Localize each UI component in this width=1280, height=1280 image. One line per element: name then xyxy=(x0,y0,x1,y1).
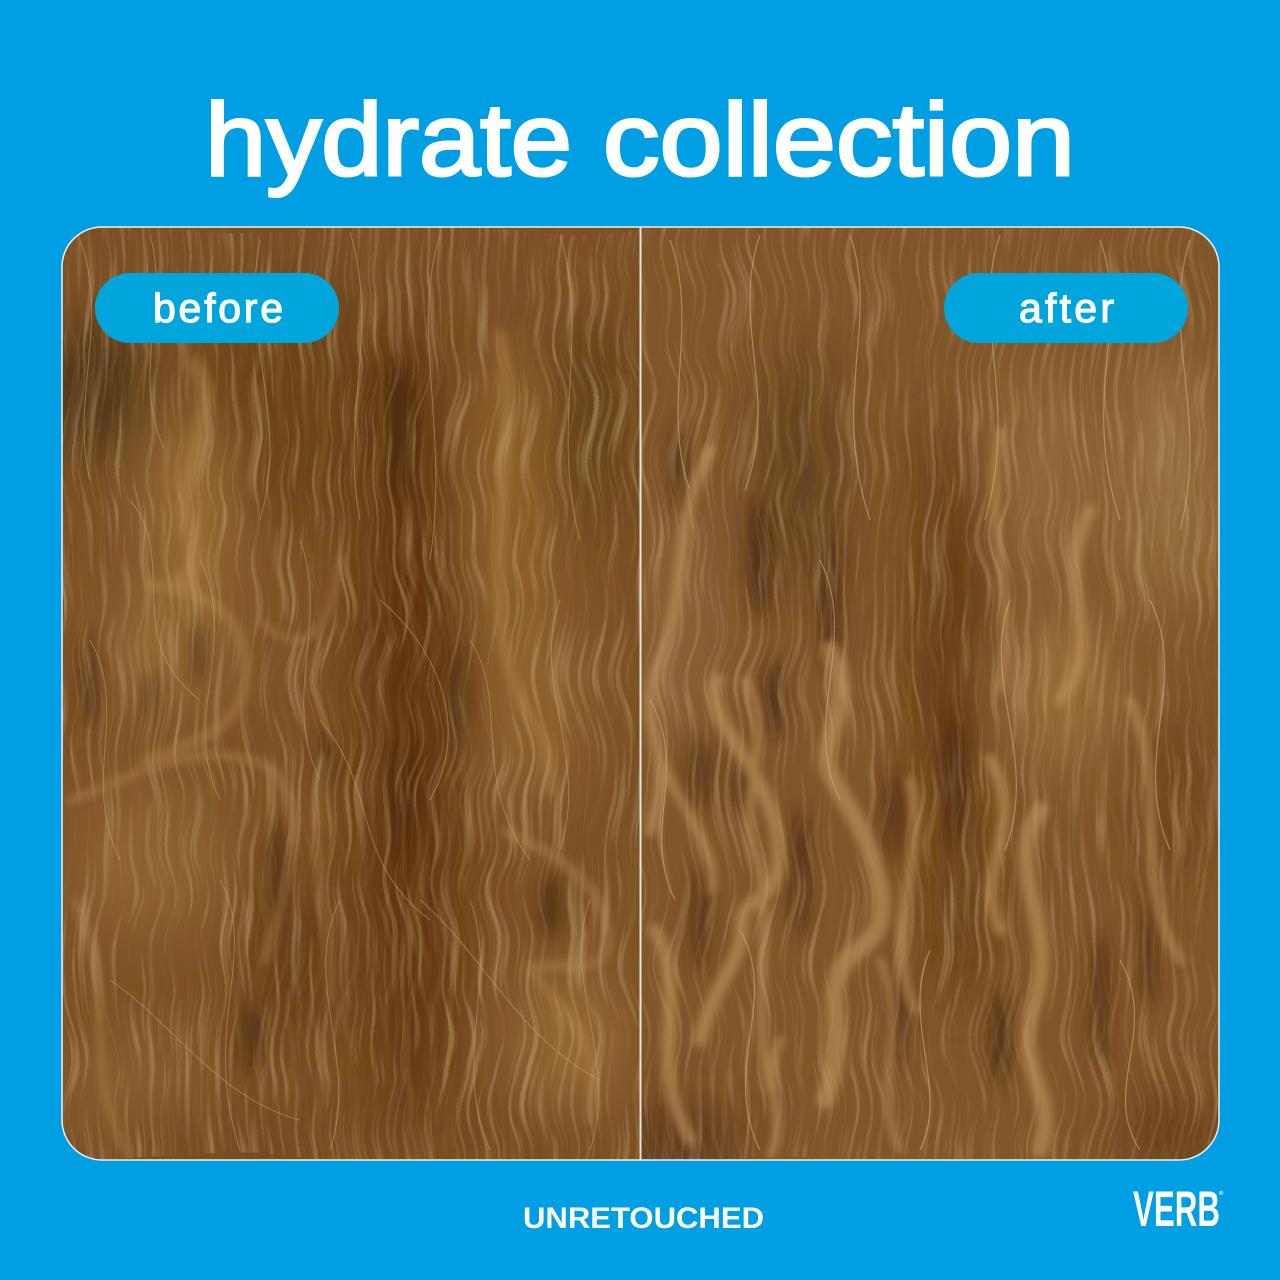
title: hydrate xyxy=(205,82,572,197)
brand logo: VERB xyxy=(1133,1181,1224,1237)
before label: before xyxy=(153,285,283,331)
after label xyxy=(944,273,1188,343)
divider xyxy=(640,227,642,1160)
panel: before and after hair photos xyxy=(45,227,1230,1170)
panel: after hair photo xyxy=(620,227,1230,1170)
unretouched caption: UNRETOUCHED xyxy=(523,1202,764,1235)
after label: after xyxy=(1019,285,1114,331)
title: collection xyxy=(603,82,1075,197)
title xyxy=(205,82,1075,197)
before label xyxy=(95,273,339,343)
panel border xyxy=(62,227,1219,1160)
brand logo: VERB: ® xyxy=(1219,1190,1224,1197)
panel: before hair photo xyxy=(45,227,640,1160)
brand logo: VERB: VERB xyxy=(1133,1181,1220,1237)
